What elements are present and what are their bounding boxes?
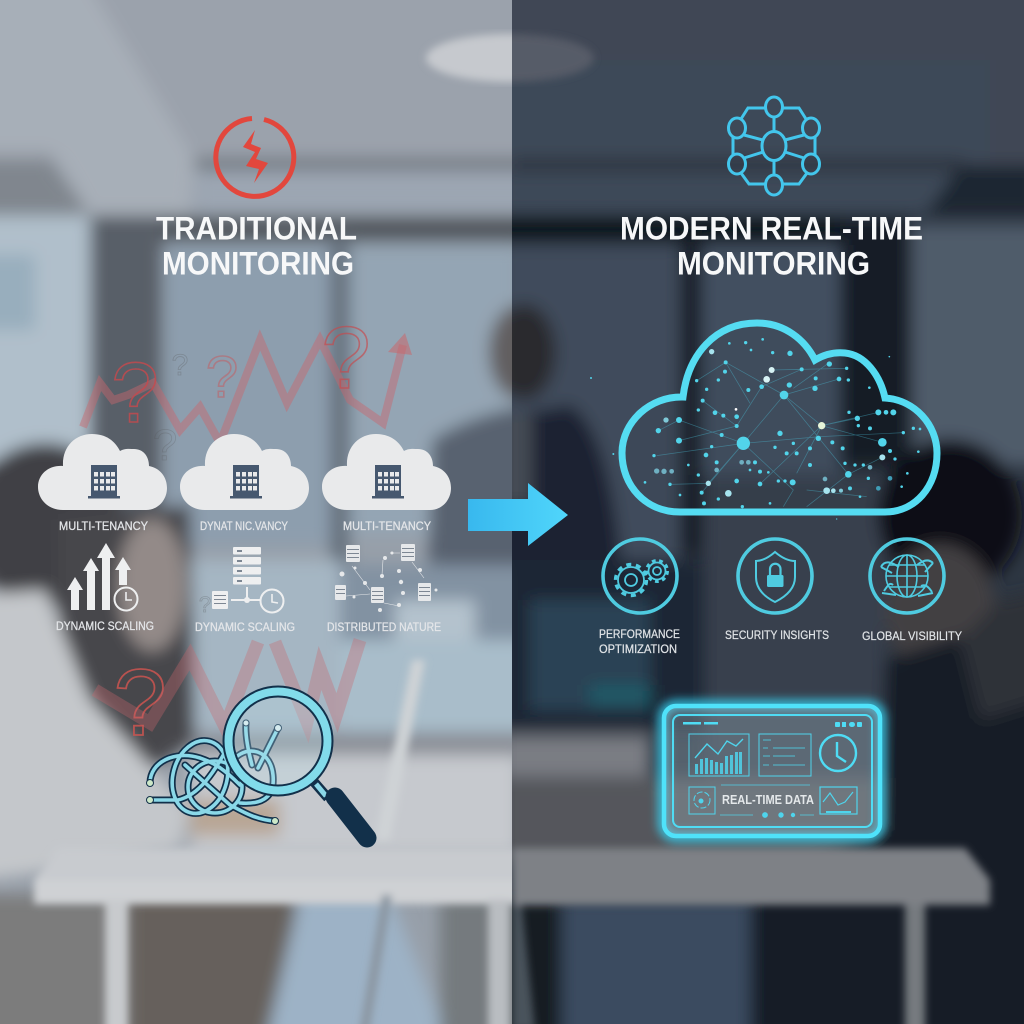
panel: three tenant clouds <box>38 434 451 510</box>
labels: modern capabilities: PERFORMANCE <box>599 629 680 641</box>
labels: cloud row: MULTI-TENANCY <box>59 521 148 533</box>
labels: cloud row: DYNAT NIC.VANCY <box>200 521 288 533</box>
labels: cloud row: MULTI-TENANCY <box>343 521 431 533</box>
icon: scaling arrows with clock <box>67 543 138 610</box>
heading: traditional monitoring <box>156 210 357 282</box>
labels: modern capabilities: SECURITY INSIGHTS <box>725 630 829 642</box>
icon: cyan network hexagon <box>728 97 820 195</box>
top bar <box>683 722 862 727</box>
labels: scaling row: DYNAMIC SCALING <box>56 621 154 633</box>
cloud outline <box>622 323 937 512</box>
icon: distributed servers <box>335 544 438 612</box>
chart panel <box>689 734 749 776</box>
heading: modern real-time monitoring: MODERN REAL-TIME <box>620 210 923 246</box>
separators and dots <box>720 785 814 817</box>
network nodes and links <box>590 338 921 520</box>
lower right chart <box>820 787 857 814</box>
cloud: multi-tenancy 1 <box>38 434 167 510</box>
label: real-time data: REAL-TIME DATA <box>722 792 815 807</box>
question marks: ? <box>322 308 370 407</box>
icon: red lightning circle <box>216 118 294 196</box>
labels: modern capabilities <box>599 629 962 656</box>
question marks: ? <box>172 349 188 382</box>
cloud: multi-tenancy 2 <box>180 434 309 510</box>
labels: cloud row <box>59 521 431 533</box>
labels: scaling row: DYNAMIC SCALING <box>195 622 295 634</box>
question marks: ? <box>114 650 166 756</box>
icon: performance optimization gears <box>603 539 677 613</box>
question marks: ? <box>206 345 238 410</box>
question marks: ? <box>153 421 177 470</box>
arrow: traditional to modern <box>468 483 568 546</box>
heading: traditional monitoring: TRADITIONAL <box>156 210 357 246</box>
ceiling light: right half <box>512 32 594 84</box>
text panel <box>759 734 811 776</box>
icon: global visibility globe <box>870 539 944 613</box>
chart: chaotic red zigzag arrow <box>83 333 412 443</box>
background photo: left light half <box>0 0 555 1024</box>
panel: real-time data dashboard <box>663 705 881 837</box>
heading: modern real-time monitoring <box>620 210 923 282</box>
icon: magnifying glass <box>228 692 367 838</box>
cloud network <box>590 323 937 520</box>
question marks <box>111 308 370 756</box>
labels: modern capabilities: GLOBAL VISIBILITY <box>862 631 962 643</box>
icon: security shield with lock <box>738 539 812 613</box>
icon: tangled wires under magnifying glass <box>146 720 282 824</box>
labels: scaling row: DISTRIBUTED NATURE <box>327 622 441 634</box>
question marks: ? <box>111 346 159 441</box>
background photo: right dark half <box>490 0 1024 1024</box>
lower left gauge <box>689 787 715 814</box>
dashboard glow <box>663 705 881 837</box>
chart: lower red zigzag <box>95 640 360 727</box>
icon: server stack with clock <box>212 547 284 612</box>
dashboard frame <box>664 706 880 836</box>
heading: modern real-time monitoring: MONITORING <box>677 246 870 282</box>
ceiling light <box>424 31 512 85</box>
labels: modern capabilities: OPTIMIZATION <box>599 644 677 656</box>
question marks: ? <box>199 592 211 617</box>
clock <box>820 735 856 771</box>
cloud: multi-tenancy 3 <box>322 434 451 510</box>
heading: traditional monitoring: MONITORING <box>162 246 354 282</box>
labels: scaling row <box>56 621 441 634</box>
